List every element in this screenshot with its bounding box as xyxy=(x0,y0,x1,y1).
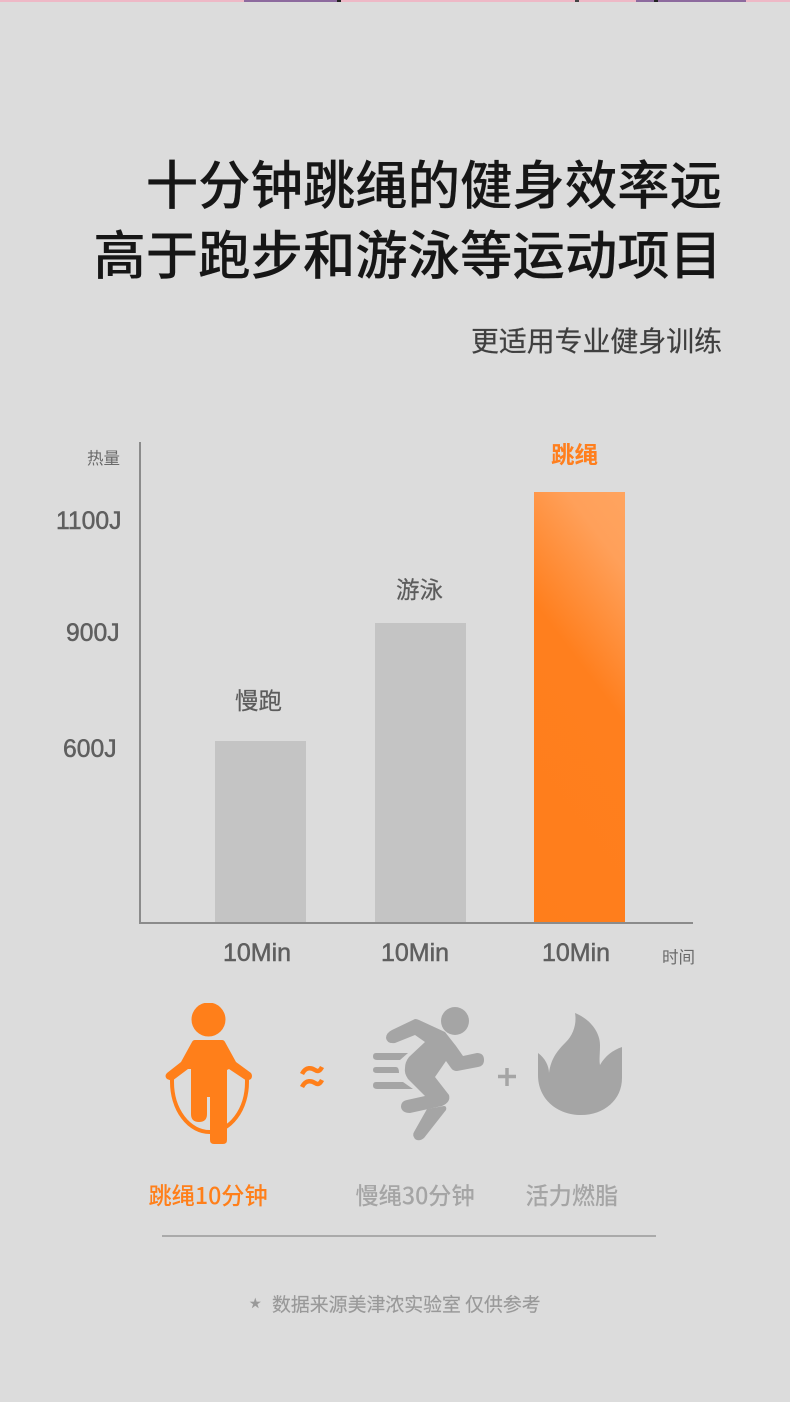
subtitle: 更适用专业健身训练 xyxy=(471,320,722,360)
footnote: 数据来源美津浓实验室 仅供参考 xyxy=(272,1290,541,1317)
bar: swim xyxy=(375,623,466,922)
icon: jump rope person xyxy=(166,1003,252,1144)
y tick 1100J: 1100J xyxy=(56,508,121,535)
axes xyxy=(139,442,693,924)
bar: jump rope xyxy=(534,492,625,922)
bar: slow run xyxy=(215,741,306,922)
y axis title: 热量 xyxy=(87,445,120,469)
title xyxy=(93,144,722,290)
bar label: jump rope: 跳绳 xyxy=(551,436,598,470)
x tick 1: 10Min xyxy=(223,939,291,967)
icon: approx symbol xyxy=(300,1066,324,1088)
icon: flame xyxy=(538,1013,622,1115)
bar label: slow run: 慢跑 xyxy=(235,682,282,716)
x tick 3: 10Min xyxy=(542,939,610,967)
bar chart xyxy=(56,436,695,968)
bar label: swim: 游泳 xyxy=(396,571,443,605)
label: slow rope 30 minutes: 慢绳30分钟 xyxy=(356,1177,475,1211)
x tick 2: 10Min xyxy=(381,939,449,967)
y tick 900J: 900J xyxy=(66,620,120,647)
footnote: ★ xyxy=(249,1296,262,1312)
label: jump rope 10 minutes: 跳绳10分钟 xyxy=(148,1177,268,1211)
label: fat burn: 活力燃脂 xyxy=(526,1177,618,1211)
plus sign xyxy=(498,1068,516,1086)
title: 高于跑步和游泳等运动项目 xyxy=(93,214,722,290)
icon: running person xyxy=(373,1007,484,1140)
title: 十分钟跳绳的健身效率远 xyxy=(146,144,722,220)
top edge strip xyxy=(0,0,790,2)
y tick 600J: 600J xyxy=(63,736,117,763)
x axis title: 时间 xyxy=(662,944,695,968)
